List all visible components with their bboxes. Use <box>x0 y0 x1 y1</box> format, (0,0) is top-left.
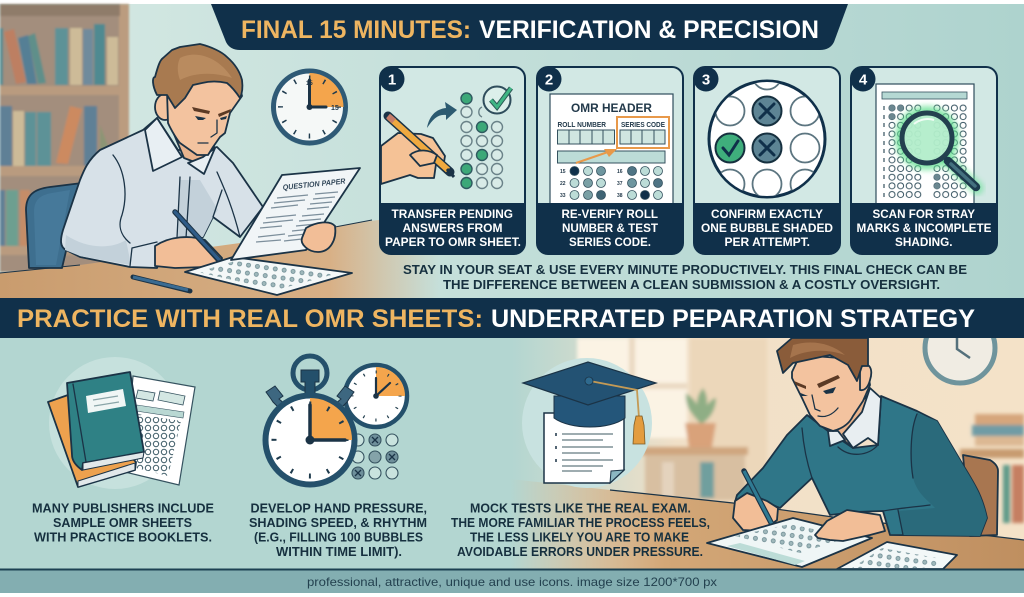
caption: ANSWERS FROM <box>402 221 502 235</box>
bubbles <box>461 93 502 188</box>
face <box>167 70 242 155</box>
section two title: UNDERRATED PEPARATION STRATEGY <box>491 305 975 333</box>
pen <box>175 212 226 268</box>
omr header sheet: 16 <box>617 169 623 175</box>
omr answer sheet on desk <box>185 257 352 295</box>
paper <box>544 413 624 483</box>
booklet text: SAMPLE OMR SHEETS <box>53 515 192 530</box>
cap <box>554 396 625 427</box>
reminder text <box>403 262 967 292</box>
caption <box>385 207 521 249</box>
stopwatch crown <box>293 356 327 390</box>
wall clock: 15 minutes: 15 <box>306 81 313 87</box>
caption: ONE BUBBLE SHADED <box>701 221 833 235</box>
booklet text <box>32 500 214 544</box>
footer text: professional, attractive, unique and use icons. image size 1200*700 px <box>307 575 717 589</box>
reminder text: STAY IN YOUR SEAT & USE EVERY MINUTE PRODUCTIVELY. THIS FINAL CHECK CAN BE <box>403 262 967 277</box>
magnifying glass <box>895 106 977 188</box>
title text: VERIFICATION & PRECISION <box>479 16 819 44</box>
step card 4 <box>851 67 997 254</box>
caption <box>562 207 659 249</box>
booklet text: MANY PUBLISHERS INCLUDE <box>32 500 214 516</box>
facial features <box>198 120 217 143</box>
hair <box>153 44 242 108</box>
shirt <box>61 118 263 268</box>
caption: MARKS & INCOMPLETE <box>856 221 992 235</box>
omr header sheet: SERIES CODE <box>621 122 665 129</box>
step 1 badge: 1 <box>388 72 396 88</box>
caption: SCAN FOR STRAY <box>872 207 975 221</box>
curved arrow <box>427 102 457 128</box>
title banner <box>211 4 848 50</box>
hand holding paper <box>302 222 335 252</box>
booklet text: WITH PRACTICE BOOKLETS. <box>34 530 212 544</box>
stopwatch face <box>266 396 354 484</box>
right hand <box>815 510 885 541</box>
tassel <box>590 381 639 418</box>
step 2 badge: 2 <box>545 72 553 88</box>
caption: SHADING. <box>895 235 952 249</box>
step 4 badge: 4 <box>859 72 868 88</box>
sweater <box>735 396 987 536</box>
omr header sheet <box>550 94 673 204</box>
omr header sheet: 37 <box>617 181 623 187</box>
title text: FINAL 15 MINUTES: <box>241 16 471 44</box>
speed practice text: SHADING SPEED, & RHYTHM <box>249 515 427 530</box>
caption <box>856 207 992 249</box>
omr header sheet: OMR HEADER <box>571 101 652 115</box>
caption: TRANSFER PENDING <box>392 207 513 221</box>
bookcase <box>0 4 129 272</box>
step 3 badge: 3 <box>702 72 710 88</box>
omr sheet under hand <box>707 518 872 567</box>
top section background <box>0 4 1024 298</box>
collar <box>145 118 182 171</box>
facial features <box>794 375 840 389</box>
caption: PAPER TO OMR SHEET. <box>385 235 521 249</box>
magnified bubbles <box>708 80 826 198</box>
pen on desk <box>133 277 190 291</box>
chair right <box>963 455 998 536</box>
omr header sheet: 33 <box>560 193 566 199</box>
caption: NUMBER & TEST <box>562 221 659 235</box>
caption: SERIES CODE. <box>569 235 651 249</box>
section two title: PRACTICE WITH REAL OMR SHEETS: <box>17 305 483 333</box>
step 2 badge <box>536 66 562 92</box>
omr header sheet: 22 <box>560 181 566 187</box>
wall clock right <box>925 313 995 383</box>
orange book <box>48 395 136 487</box>
question paper: QUESTION PAPER <box>282 176 346 192</box>
person filling omr sheet <box>733 338 987 536</box>
mock test text: MOCK TESTS LIKE THE REAL EXAM. <box>470 500 691 516</box>
wall clock: 15 minutes <box>272 70 348 146</box>
icon: practice booklets <box>48 357 195 489</box>
wall clock: 15 minutes: 15 <box>331 105 339 112</box>
left hand <box>155 237 222 268</box>
step card 3 <box>694 60 840 254</box>
mock test text <box>451 500 710 559</box>
check badge <box>484 86 511 114</box>
mock test text: THE LESS LIKELY YOU ARE TO MAKE <box>470 530 689 544</box>
desk bottom <box>510 479 1024 570</box>
second sheet <box>837 542 957 569</box>
speed practice text: DEVELOP HAND PRESSURE, <box>250 500 427 516</box>
speed practice text <box>249 500 427 559</box>
section two banner <box>0 298 1024 338</box>
neck <box>168 120 214 166</box>
omr header sheet: 38 <box>617 193 623 199</box>
bottom section background <box>0 338 1024 570</box>
question paper <box>231 168 360 260</box>
hand with pencil <box>381 116 454 184</box>
room background <box>577 338 1024 523</box>
step card 2 <box>537 67 683 254</box>
teal book <box>67 372 144 470</box>
step 4 badge <box>850 66 876 92</box>
omr sheet <box>876 84 974 204</box>
caption: RE-VERIFY ROLL <box>562 207 658 221</box>
person reading question paper <box>61 44 263 268</box>
mock test text: AVOIDABLE ERRORS UNDER PRESSURE. <box>457 544 703 559</box>
step 1 badge <box>380 66 404 92</box>
caption <box>701 207 833 249</box>
footer <box>0 568 1024 593</box>
icon: stopwatch and bubbles <box>266 356 407 484</box>
desk top <box>0 212 450 298</box>
caption: PER ATTEMPT. <box>724 235 810 249</box>
speed practice text: (E.G., FILLING 100 BUBBLES <box>254 530 423 544</box>
omr header sheet: 15 <box>560 169 566 175</box>
icon: graduation cap and paper <box>522 358 656 488</box>
ear <box>155 94 175 120</box>
omr header sheet: ROLL NUMBER <box>558 122 606 129</box>
caption: CONFIRM EXACTLY <box>711 207 823 221</box>
step card 1 <box>380 67 525 254</box>
small clock <box>345 365 407 427</box>
hair <box>777 338 868 381</box>
hand with pen <box>733 493 778 531</box>
neck <box>833 395 868 448</box>
speed practice text: WITHIN TIME LIMIT). <box>276 544 402 559</box>
reminder text: THE DIFFERENCE BETWEEN A CLEAN SUBMISSION & A COSTLY OVERSIGHT. <box>443 277 940 292</box>
chair <box>26 183 82 268</box>
omr sample sheet <box>125 376 195 485</box>
bubbles <box>352 434 398 479</box>
mock test text: THE MORE FAMILIAR THE PROCESS FEELS, <box>451 515 710 530</box>
step 3 badge <box>694 66 718 92</box>
collar <box>828 431 845 446</box>
face <box>792 355 870 431</box>
